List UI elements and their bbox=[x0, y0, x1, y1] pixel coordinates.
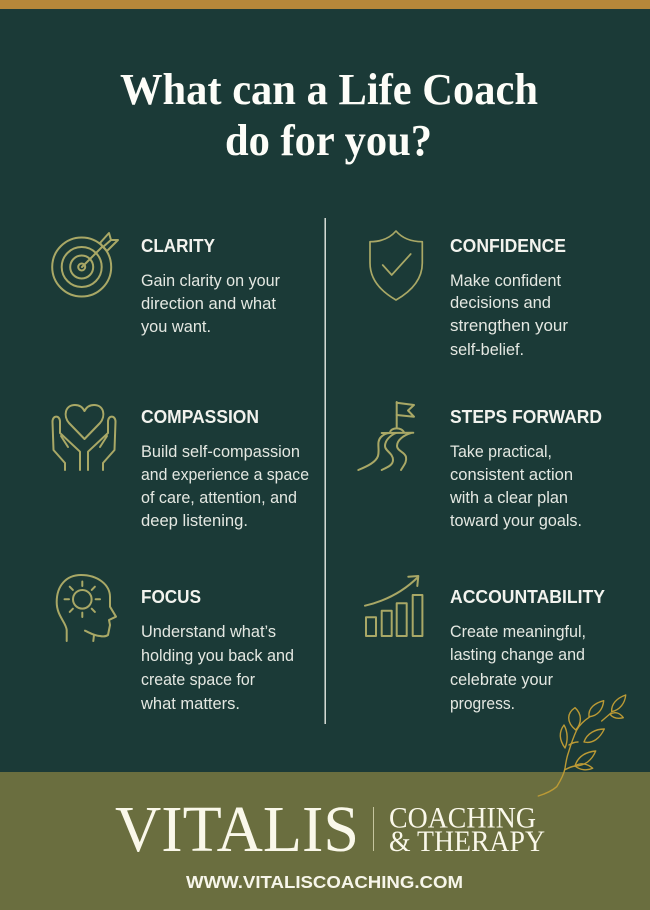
body text: Take practical, bbox=[450, 443, 552, 461]
body text: Build self-compassion bbox=[141, 443, 300, 461]
body text bbox=[449, 443, 582, 530]
body text bbox=[141, 443, 309, 530]
body text: holding you back and bbox=[141, 647, 294, 665]
panel: focus bbox=[57, 575, 294, 713]
website url: WWW.VITALISCOACHING.COM bbox=[186, 872, 463, 892]
icon: flag on winding paths bbox=[358, 402, 414, 470]
body text: Make confident bbox=[450, 272, 561, 290]
title: do for you? bbox=[225, 116, 432, 165]
heading: FOCUS bbox=[141, 587, 201, 607]
icon: head with sun bbox=[57, 575, 116, 641]
panel: compassion bbox=[52, 405, 309, 530]
body text: direction and what bbox=[141, 295, 276, 313]
icon: hands holding heart bbox=[52, 405, 116, 470]
body text bbox=[141, 272, 280, 336]
logo tagline bbox=[389, 802, 545, 858]
panel: steps forward bbox=[358, 402, 602, 530]
heading: COMPASSION bbox=[141, 407, 259, 427]
body text: and experience a space bbox=[141, 466, 309, 484]
brand logo bbox=[115, 793, 545, 866]
panel: clarity bbox=[52, 233, 280, 336]
body text: lasting change and bbox=[450, 646, 585, 664]
heading: CLARITY bbox=[141, 236, 215, 256]
icon: target with arrow bbox=[52, 233, 118, 296]
body text: Create meaningful, bbox=[450, 623, 586, 641]
logo separator bbox=[372, 807, 375, 851]
footer olive band bbox=[0, 772, 650, 910]
body text: deep listening. bbox=[141, 512, 248, 530]
body text: you want. bbox=[141, 318, 211, 336]
body text: progress. bbox=[450, 695, 515, 713]
body text: decisions and bbox=[450, 294, 551, 312]
icon: rising bar chart with arrow bbox=[365, 576, 422, 636]
body text: Understand what’s bbox=[141, 623, 276, 641]
body text: self-belief. bbox=[450, 341, 524, 359]
top gold bar bbox=[0, 0, 650, 9]
center divider bbox=[324, 218, 326, 724]
body text: celebrate your bbox=[450, 671, 553, 689]
body text: create space for bbox=[141, 671, 255, 689]
logo tagline: COACHING bbox=[389, 802, 536, 834]
body text bbox=[450, 272, 569, 359]
body text: Gain clarity on your bbox=[141, 272, 280, 290]
logo tagline: & THERAPY bbox=[389, 825, 545, 858]
heading: STEPS FORWARD bbox=[450, 407, 602, 427]
body text: of care, attention, and bbox=[141, 489, 297, 507]
body text bbox=[140, 623, 294, 713]
panel: confidence bbox=[370, 231, 569, 359]
body text: what matters. bbox=[140, 695, 240, 713]
title: What can a Life Coach bbox=[120, 65, 538, 114]
body text: strengthen your bbox=[450, 317, 569, 335]
panel: accountability bbox=[365, 576, 605, 713]
body text: with a clear plan bbox=[449, 489, 568, 507]
logo wordmark: VITALIS bbox=[115, 793, 359, 866]
body text bbox=[450, 623, 586, 713]
body text: toward your goals. bbox=[450, 512, 582, 530]
title bbox=[120, 65, 538, 165]
icon: gold leaf sprig bbox=[538, 695, 626, 796]
icon: shield with check bbox=[370, 231, 422, 300]
body text: consistent action bbox=[450, 466, 573, 484]
heading: CONFIDENCE bbox=[450, 236, 566, 256]
heading: ACCOUNTABILITY bbox=[450, 587, 605, 607]
